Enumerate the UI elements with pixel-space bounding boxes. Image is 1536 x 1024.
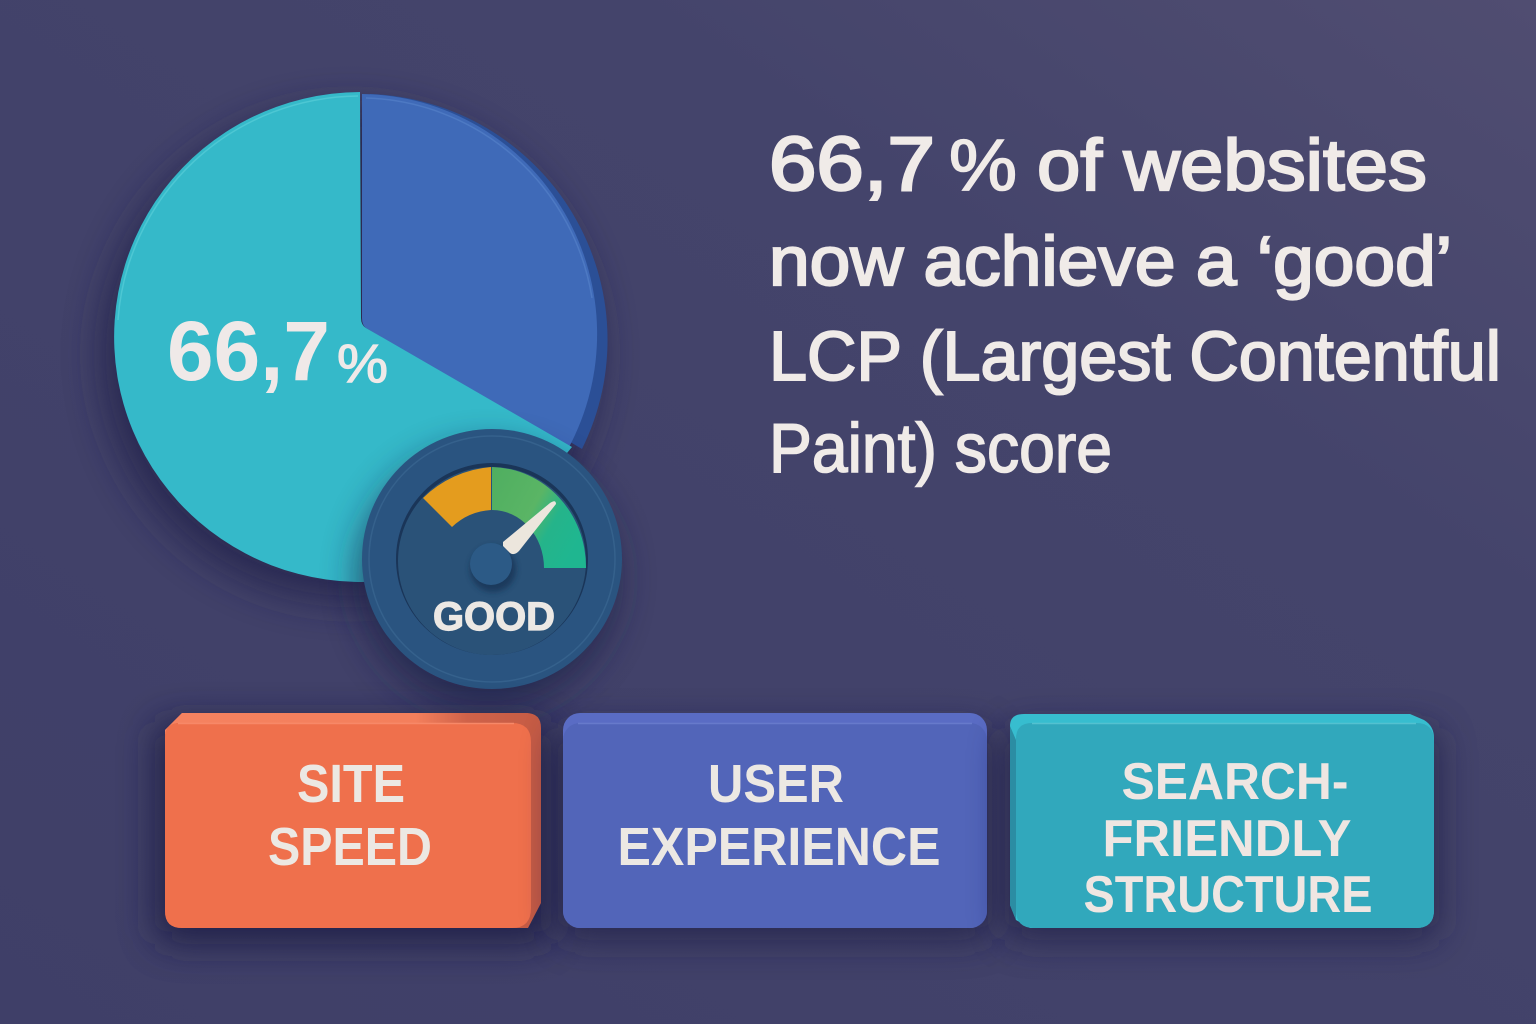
card label: SITE xyxy=(297,754,405,814)
gauge segment: green xyxy=(492,467,586,568)
headline: % xyxy=(949,126,1017,206)
card label: FRIENDLY xyxy=(1102,810,1352,868)
card label: SEARCH- xyxy=(1122,753,1348,811)
card label: STRUCTURE xyxy=(1084,866,1372,924)
card: site speed xyxy=(155,713,551,944)
gauge badge xyxy=(358,429,622,708)
headline: LCP (Largest Contentful xyxy=(769,317,1501,395)
gauge needle xyxy=(503,501,556,554)
pie slice: remaining share, blue xyxy=(362,94,608,449)
card: user experience xyxy=(558,713,992,940)
card label: SPEED xyxy=(268,817,432,877)
pie slice: 66,7 percent, teal xyxy=(114,92,572,582)
gauge label: GOOD xyxy=(433,595,555,639)
headline: Paint) score xyxy=(769,409,1112,487)
headline: 66,7 xyxy=(769,122,935,207)
card label: EXPERIENCE xyxy=(618,817,940,877)
card label xyxy=(1084,753,1372,924)
card label xyxy=(268,754,432,877)
gauge segment: amber xyxy=(423,467,491,527)
headline xyxy=(769,122,1501,487)
pie chart xyxy=(100,92,608,602)
pie value label: % xyxy=(337,334,388,394)
card: search-friendly structure xyxy=(1005,714,1439,940)
card label: USER xyxy=(708,754,844,814)
headline: of websites xyxy=(1037,126,1427,206)
card label xyxy=(618,754,940,877)
headline: now achieve a ‘good’ xyxy=(769,222,1452,300)
pie value label: 66,7 xyxy=(167,304,330,398)
gauge hub xyxy=(470,543,516,592)
